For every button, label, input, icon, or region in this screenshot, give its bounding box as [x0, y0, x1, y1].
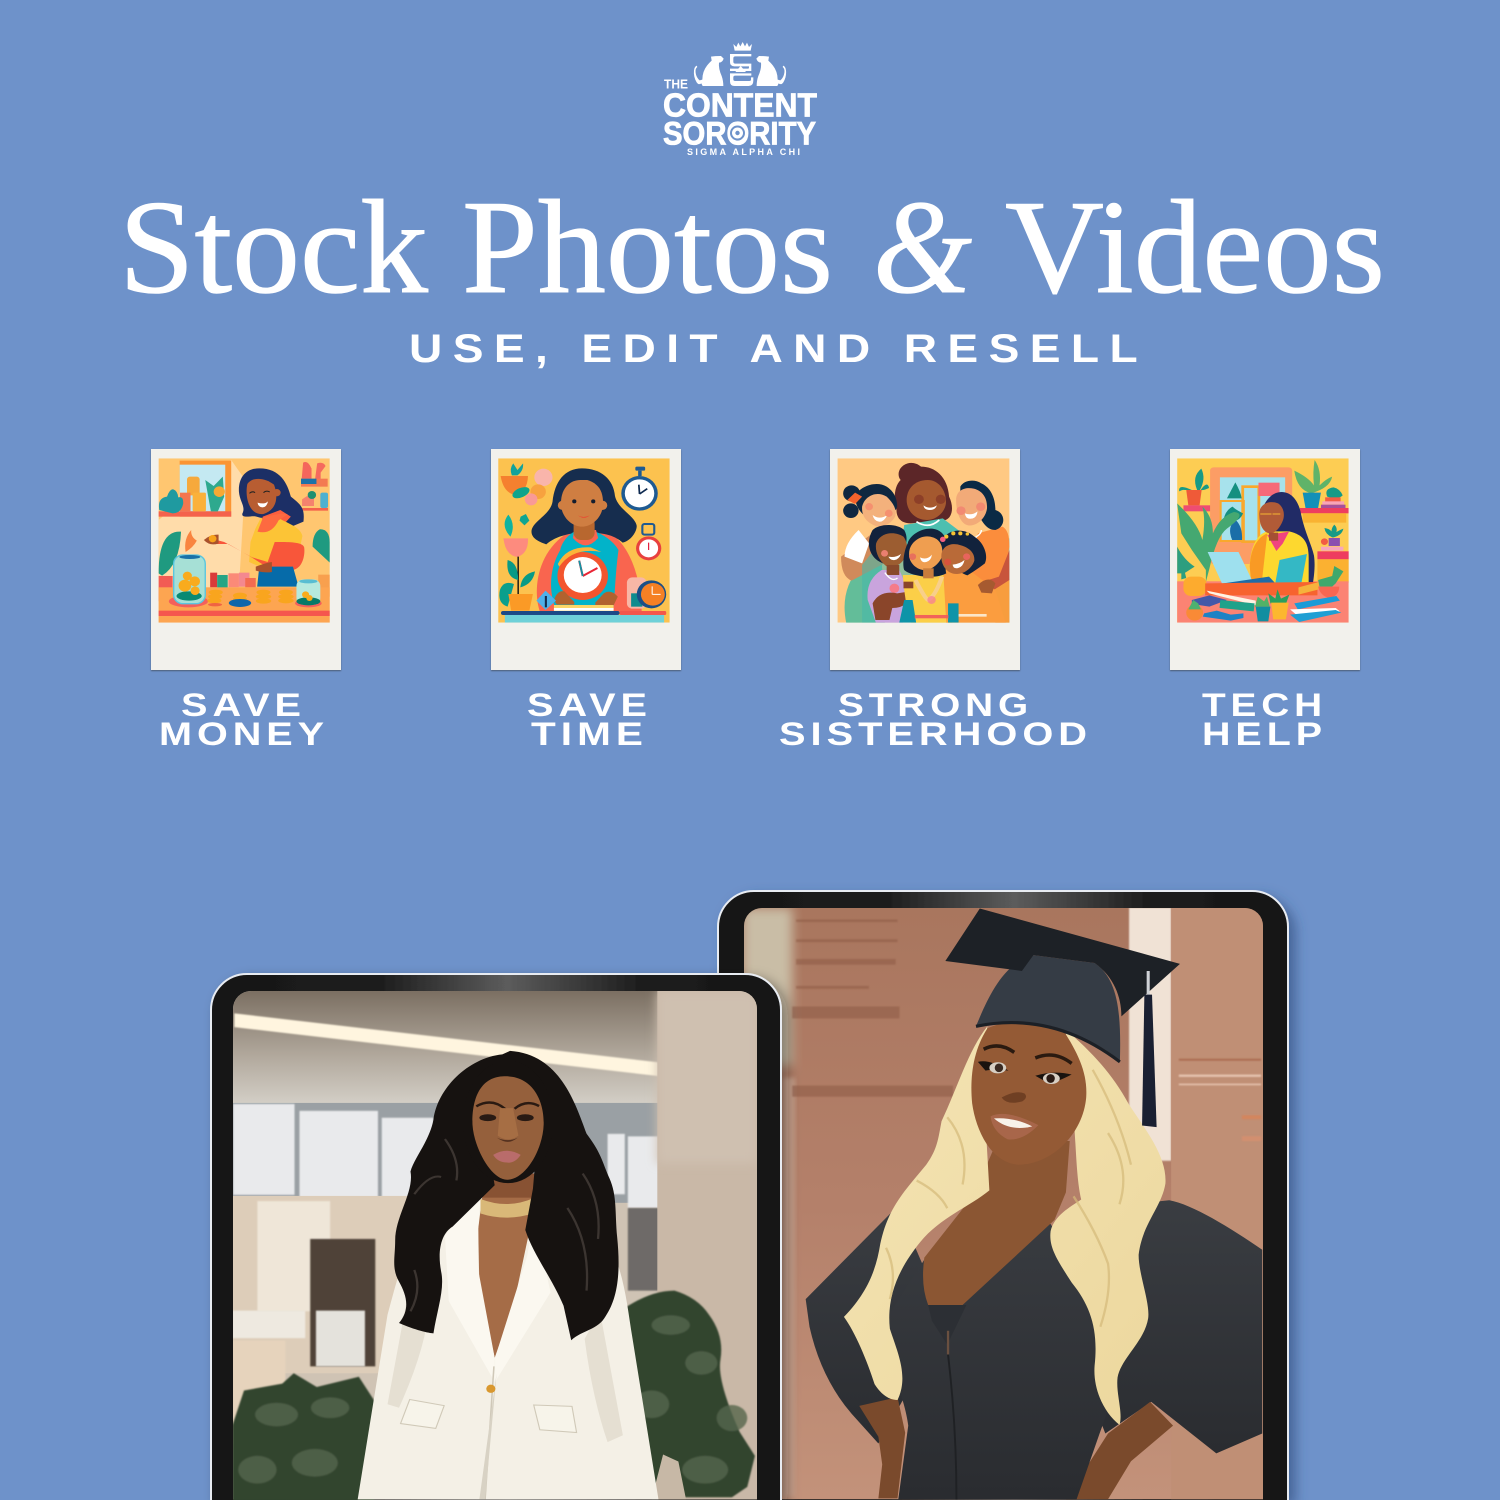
- pocket flaps and button: [401, 1385, 577, 1433]
- facial features: [978, 1046, 1072, 1140]
- white blazer: [358, 1191, 658, 1499]
- label: save time: [527, 687, 652, 752]
- logo word: SORORITY: SORORITY: [663, 116, 816, 152]
- illustration: woman at laptops: [1177, 458, 1349, 623]
- label: save money: MONEY: [159, 716, 329, 752]
- tablet body: [718, 891, 1288, 1500]
- office plants: [233, 1291, 755, 1500]
- blonde hair: [844, 1026, 1166, 1425]
- label: save time: TIME: [531, 716, 648, 752]
- tablet: graduate photo: [718, 891, 1288, 1500]
- polaroid frame: [151, 449, 341, 670]
- logo word: CONTENT: CONTENT: [663, 86, 817, 124]
- label: strong sisterhood: [779, 687, 1092, 752]
- label: save money: [159, 687, 329, 752]
- lapels: [445, 1188, 551, 1382]
- title: [119, 173, 1385, 321]
- label: tech help: TECH: [1202, 687, 1327, 723]
- neck and chest: [478, 1196, 532, 1358]
- graduation cap: [945, 908, 1180, 1127]
- logo emblem: lions, crown and monogram: [694, 42, 786, 86]
- illustration: woman with clocks: [498, 458, 670, 623]
- title: Photos: [462, 173, 833, 321]
- long black hair: [394, 1051, 619, 1340]
- label: save money: SAVE: [181, 687, 306, 723]
- title: Stock: [119, 173, 428, 321]
- illustration: woman saving coins: [159, 458, 330, 623]
- facial features: [476, 1102, 539, 1163]
- title: Videos: [1005, 173, 1385, 321]
- logo word: THE: THE: [664, 76, 688, 92]
- arms: [859, 1397, 1173, 1499]
- tablet: businesswoman photo: [211, 974, 781, 1500]
- illustration: group of smiling women: [838, 458, 1009, 623]
- polaroid: save money: [151, 449, 341, 752]
- polaroid: tech help: [1170, 449, 1360, 752]
- neck and chest: [923, 1141, 1070, 1305]
- photo: woman in white blazer in an office: [233, 991, 758, 1500]
- polaroid frame: [1170, 449, 1360, 670]
- face: [971, 1021, 1086, 1165]
- tablet body: [211, 974, 781, 1500]
- polaroid frame: [830, 449, 1020, 670]
- label: strong sisterhood: SISTERHOOD: [779, 716, 1092, 752]
- logo tagline: SIGMA ALPHA CHI: [687, 147, 800, 157]
- gown sleeves: [806, 1200, 1262, 1453]
- polaroid: save time: [491, 449, 681, 752]
- label: tech help: [1202, 687, 1327, 752]
- face: [472, 1076, 544, 1180]
- title: &: [873, 173, 972, 321]
- subtitle: USE, EDIT AND RESELL: [409, 327, 1148, 371]
- label: tech help: HELP: [1202, 716, 1327, 752]
- polaroid frame: [491, 449, 681, 670]
- logo: The Content Sorority: [663, 42, 817, 157]
- label: save time: SAVE: [527, 687, 652, 723]
- photo: graduate in cap and gown: [743, 908, 1265, 1499]
- label: strong sisterhood: STRONG: [838, 687, 1033, 723]
- logo aperture in the O: [730, 126, 745, 140]
- gold choker: [481, 1198, 533, 1218]
- polaroid: strong sisterhood: [779, 449, 1092, 752]
- torso: [898, 1224, 1102, 1500]
